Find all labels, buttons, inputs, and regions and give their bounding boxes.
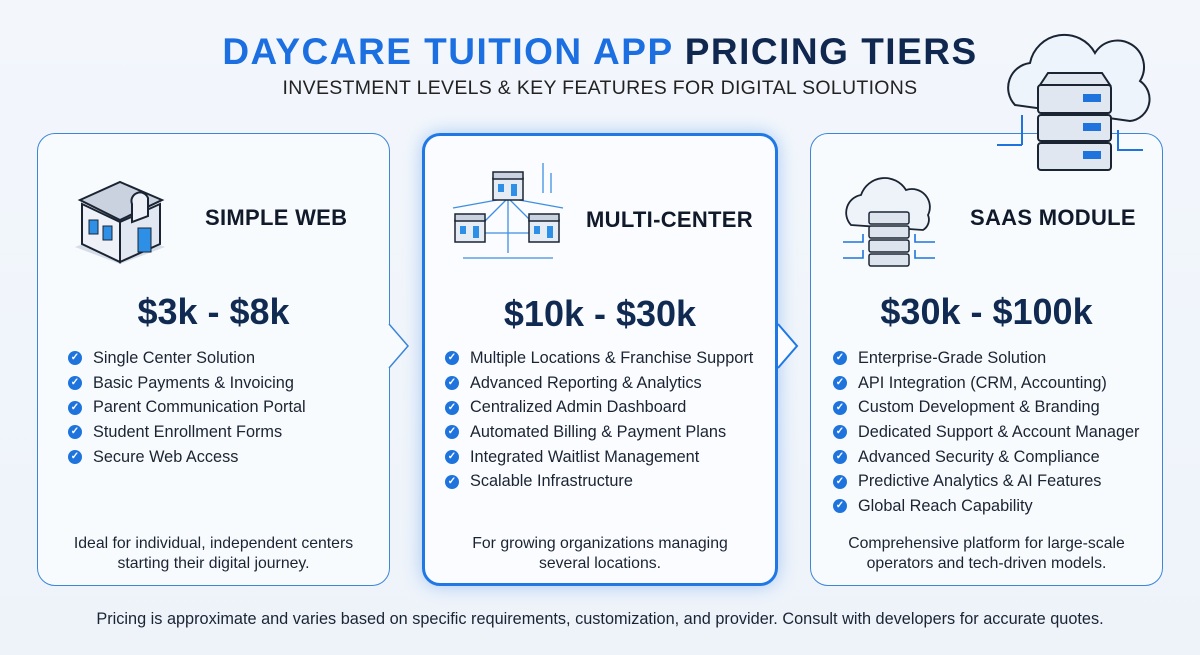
description: several locations. [539, 555, 661, 572]
features list: Basic Payments & Invoicing [93, 374, 294, 392]
description [472, 535, 728, 572]
icon: network of buildings [452, 163, 564, 259]
features list: Advanced Security & Compliance [858, 448, 1100, 466]
heading: MULTI-CENTER [586, 207, 753, 232]
description: For growing organizations managing [472, 535, 728, 552]
features list: Parent Communication Portal [93, 398, 306, 416]
features list: API Integration (CRM, Accounting) [858, 374, 1107, 392]
features list [833, 349, 1140, 515]
features list: Dedicated Support & Account Manager [858, 423, 1139, 441]
price: $3k - $8k [137, 291, 290, 332]
panel: multi-center [422, 133, 778, 586]
description [848, 535, 1125, 572]
price: $30k - $100k [880, 291, 1093, 332]
features list: Global Reach Capability [858, 497, 1033, 515]
description: Ideal for individual, independent centers [74, 535, 353, 552]
price: $10k - $30k [504, 293, 696, 334]
icon: cloud server [843, 177, 935, 267]
heading: SIMPLE WEB [205, 205, 347, 230]
subtitle: INVESTMENT LEVELS & KEY FEATURES FOR DIGITAL SOLUTIONS [283, 77, 917, 99]
features list: Predictive Analytics & AI Features [858, 472, 1101, 490]
features list: Enterprise-Grade Solution [858, 349, 1046, 367]
features list [68, 349, 306, 466]
icon: large cloud server [997, 34, 1151, 171]
icon: building [76, 180, 164, 264]
arrow: notch 1 [388, 324, 409, 368]
features list [445, 349, 754, 490]
features list: Scalable Infrastructure [470, 472, 633, 490]
footer note: Pricing is approximate and varies based on specific requirements, customization, and provider. Consult with developers for accurate quotes. [96, 610, 1104, 628]
description: Comprehensive platform for large-scale [848, 535, 1125, 552]
features list: Secure Web Access [93, 448, 238, 466]
features list: Custom Development & Branding [858, 398, 1100, 416]
arrow: notch 2 [778, 323, 798, 369]
features list: Integrated Waitlist Management [470, 448, 699, 466]
description [74, 535, 353, 572]
features list: Centralized Admin Dashboard [470, 398, 686, 416]
title: DAYCARE TUITION APP PRICING TIERS [222, 31, 978, 72]
description: starting their digital journey. [118, 555, 310, 572]
features list: Multiple Locations & Franchise Support [470, 349, 753, 367]
features list: Single Center Solution [93, 349, 255, 367]
features list: Advanced Reporting & Analytics [470, 374, 702, 392]
features list: Automated Billing & Payment Plans [470, 423, 726, 441]
features list: Student Enrollment Forms [93, 423, 282, 441]
description: operators and tech-driven models. [867, 555, 1106, 572]
panel: simple web [37, 133, 390, 586]
heading: SAAS MODULE [970, 205, 1136, 230]
panel: saas module [810, 133, 1163, 586]
